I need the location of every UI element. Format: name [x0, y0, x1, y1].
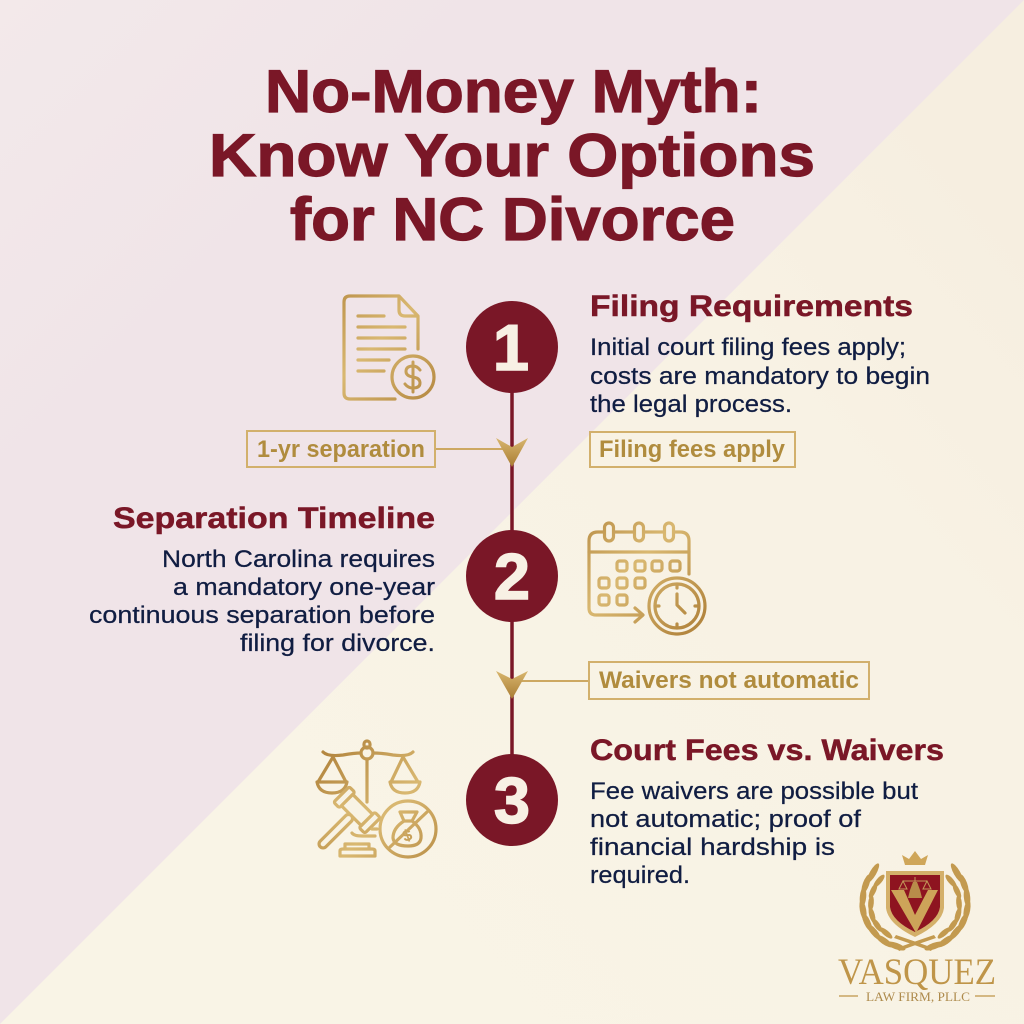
arrow 2	[496, 671, 528, 699]
title: Know Your Options	[209, 122, 815, 189]
text: court fees vs waivers: Fee waivers are possible but	[590, 778, 918, 805]
text: separation timeline: filing for divorce.	[240, 630, 435, 657]
callout: 1-yr separation: 1-yr separation	[257, 436, 425, 463]
text: separation timeline: a mandatory one-year	[173, 574, 435, 601]
text: filing requirements: costs are mandatory to begin	[590, 363, 930, 390]
text: filing requirements: Initial court filing fees apply;	[590, 334, 906, 361]
step 3 number	[466, 754, 558, 846]
icon: scales, gavel, no money	[305, 741, 436, 862]
text: court fees vs waivers: required.	[590, 862, 690, 889]
logo subtitle: LAW FIRM, PLLC	[866, 989, 970, 1004]
text: court fees vs waivers	[590, 778, 918, 889]
text: court fees vs waivers: financial hardship is	[590, 834, 835, 861]
logo scales	[899, 877, 931, 892]
step 3 number: 3	[494, 764, 530, 837]
logo: Vasquez Law Firm	[838, 851, 996, 1004]
logo crown	[902, 851, 928, 865]
gavel	[305, 787, 380, 862]
text: separation timeline: North Carolina requires	[162, 546, 435, 573]
title: No-Money Myth:	[265, 58, 762, 125]
logo laurel right	[897, 862, 972, 952]
logo laurel left	[858, 862, 933, 952]
heading: separation timeline: Separation Timeline	[113, 502, 435, 535]
text: separation timeline: continuous separation before	[89, 602, 435, 629]
icon: scales, gavel, no money: $	[401, 826, 415, 845]
callout: 1-yr separation	[247, 431, 435, 467]
text: filing requirements: the legal process.	[590, 391, 792, 418]
title: for NC Divorce	[290, 186, 735, 253]
logo column	[908, 882, 922, 898]
logo V	[891, 890, 938, 933]
callout: waivers not automatic	[589, 662, 869, 699]
icon: calendar with clock	[589, 523, 705, 634]
timeline spine	[510, 385, 514, 770]
connector: 1-yr separation to arrow	[435, 448, 505, 450]
title	[209, 58, 815, 253]
step 2 number	[466, 530, 558, 622]
heading: filing requirements: Filing Requirements	[590, 290, 913, 323]
text: separation timeline	[89, 546, 435, 657]
icon: document with dollar coin	[344, 296, 434, 399]
step 1 number	[466, 301, 558, 393]
text: court fees vs waivers: not automatic; proof of	[590, 806, 861, 833]
step 2 number: 2	[494, 540, 530, 613]
text: filing requirements	[590, 334, 930, 418]
logo name: VASQUEZ	[838, 952, 996, 993]
callout: waivers not automatic: Waivers not automatic	[599, 667, 859, 694]
heading: court fees vs waivers: Court Fees vs. Waivers	[590, 734, 944, 767]
arrow 1	[496, 438, 528, 467]
logo shield	[886, 871, 944, 937]
step 1 number: 1	[493, 311, 529, 384]
connector: waivers to arrow	[520, 680, 589, 682]
callout: filing fees apply: Filing fees apply	[599, 436, 786, 463]
